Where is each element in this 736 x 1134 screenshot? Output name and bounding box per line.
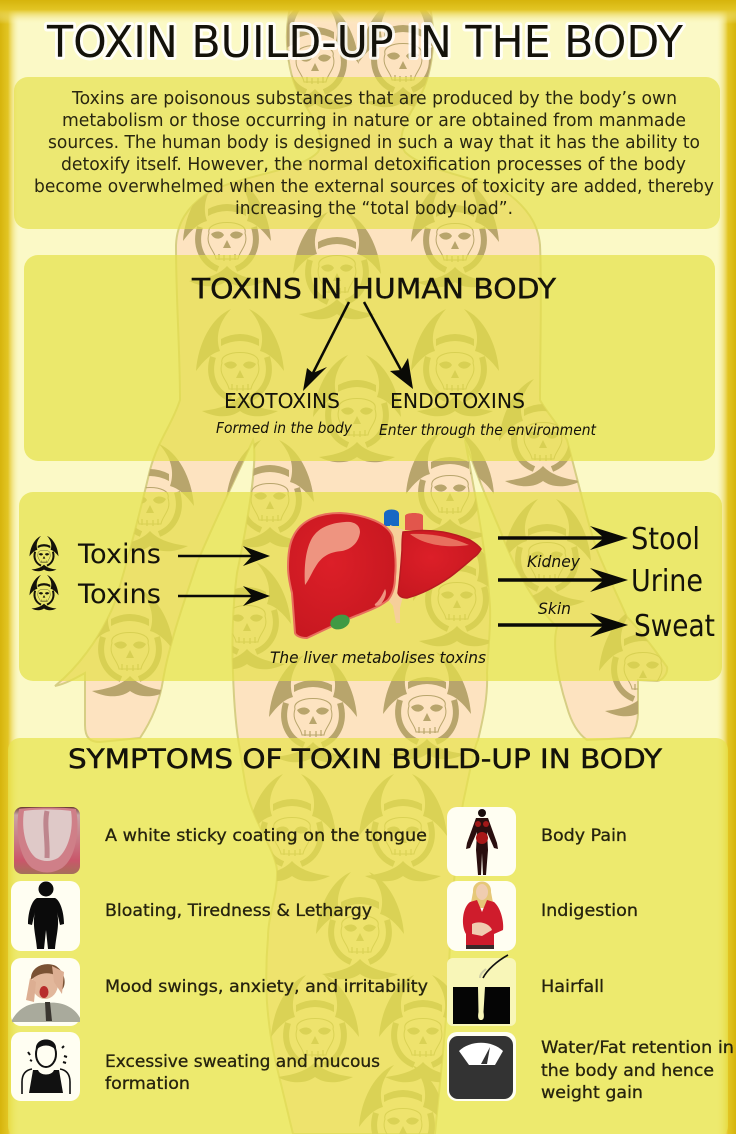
symptom: sweating text: Excessive sweating and mucous xyxy=(105,1052,380,1072)
toxins label 1: Toxins xyxy=(77,539,161,570)
symptom: retention text: weight gain xyxy=(541,1083,643,1103)
symptom: indigestion text: Indigestion xyxy=(541,901,638,921)
icon: liver xyxy=(288,510,481,638)
kidney label: Kidney xyxy=(527,552,581,571)
symptom: mood text: Mood swings, anxiety, and irritability xyxy=(105,977,428,997)
intro text xyxy=(34,88,714,219)
arrow: sweat xyxy=(498,613,628,637)
icon: biohazard 1 xyxy=(29,536,59,571)
intro text: Toxins are poisonous substances that are produced by the body’s own xyxy=(71,88,677,109)
symptom: retention text: Water/Fat retention in xyxy=(541,1038,734,1058)
title: TOXIN BUILD-UP IN THE BODY xyxy=(46,17,683,68)
icon: body pain xyxy=(447,807,516,876)
intro text: detoxify itself. However, the normal detoxification processes of the body xyxy=(61,154,686,175)
intro text: metabolism or those occurring in nature or are obtained from manmade xyxy=(62,110,686,131)
icon: bloated figure xyxy=(11,881,80,951)
arrow: to endotoxins xyxy=(364,302,413,389)
endotoxins caption: Enter through the environment xyxy=(379,421,597,439)
urine label: Urine xyxy=(631,564,703,599)
symptom: retention text: the body and hence xyxy=(541,1061,714,1081)
icon: sweating man xyxy=(11,1032,80,1101)
arrow: urine xyxy=(498,568,628,592)
icon: indigestion xyxy=(447,881,516,951)
heading: toxins in human body: TOXINS IN HUMAN BODY xyxy=(191,272,557,305)
toxins label 2: Toxins xyxy=(77,579,161,610)
icon: hairfall xyxy=(447,955,516,1026)
intro text: become overwhelmed when the external sources of toxicity are added, thereby xyxy=(34,176,714,197)
symptom: sweating text xyxy=(105,1052,380,1094)
exotoxins caption: Formed in the body xyxy=(216,419,353,437)
sweat label: Sweat xyxy=(634,609,715,644)
icon: stressed man xyxy=(11,958,80,1026)
symptom: bloating text: Bloating, Tiredness & Lethargy xyxy=(105,901,372,921)
symptom: sweating text: formation xyxy=(105,1074,190,1094)
stool label: Stool xyxy=(631,522,700,557)
intro text: sources. The human body is designed in such a way that it has the ability to xyxy=(48,132,700,153)
exotoxins label: EXOTOXINS xyxy=(224,389,340,413)
panel: liver xyxy=(19,492,722,681)
skin label: Skin xyxy=(538,599,571,618)
arrow: stool xyxy=(498,526,628,550)
arrow: toxins to liver 1 xyxy=(178,546,270,566)
symptom: hairfall text: Hairfall xyxy=(541,977,604,997)
symptom: tongue text: A white sticky coating on the tongue xyxy=(105,826,427,846)
endotoxins label: ENDOTOXINS xyxy=(390,389,525,413)
arrow: to exotoxins xyxy=(303,302,349,391)
symptom: body pain text: Body Pain xyxy=(541,826,627,846)
symptom: retention text xyxy=(541,1038,734,1103)
heading: symptoms: SYMPTOMS OF TOXIN BUILD-UP IN BODY xyxy=(68,744,663,775)
liver caption: The liver metabolises toxins xyxy=(270,648,486,667)
icon: tongue xyxy=(14,807,80,874)
panel: toxins in human body xyxy=(24,255,715,461)
arrow: toxins to liver 2 xyxy=(178,586,270,606)
intro text: increasing the “total body load”. xyxy=(235,198,513,219)
panel: introduction xyxy=(14,77,720,229)
icon: biohazard 2 xyxy=(29,575,59,610)
icon: weighing scale xyxy=(447,1032,516,1101)
panel: symptoms xyxy=(8,738,734,1134)
